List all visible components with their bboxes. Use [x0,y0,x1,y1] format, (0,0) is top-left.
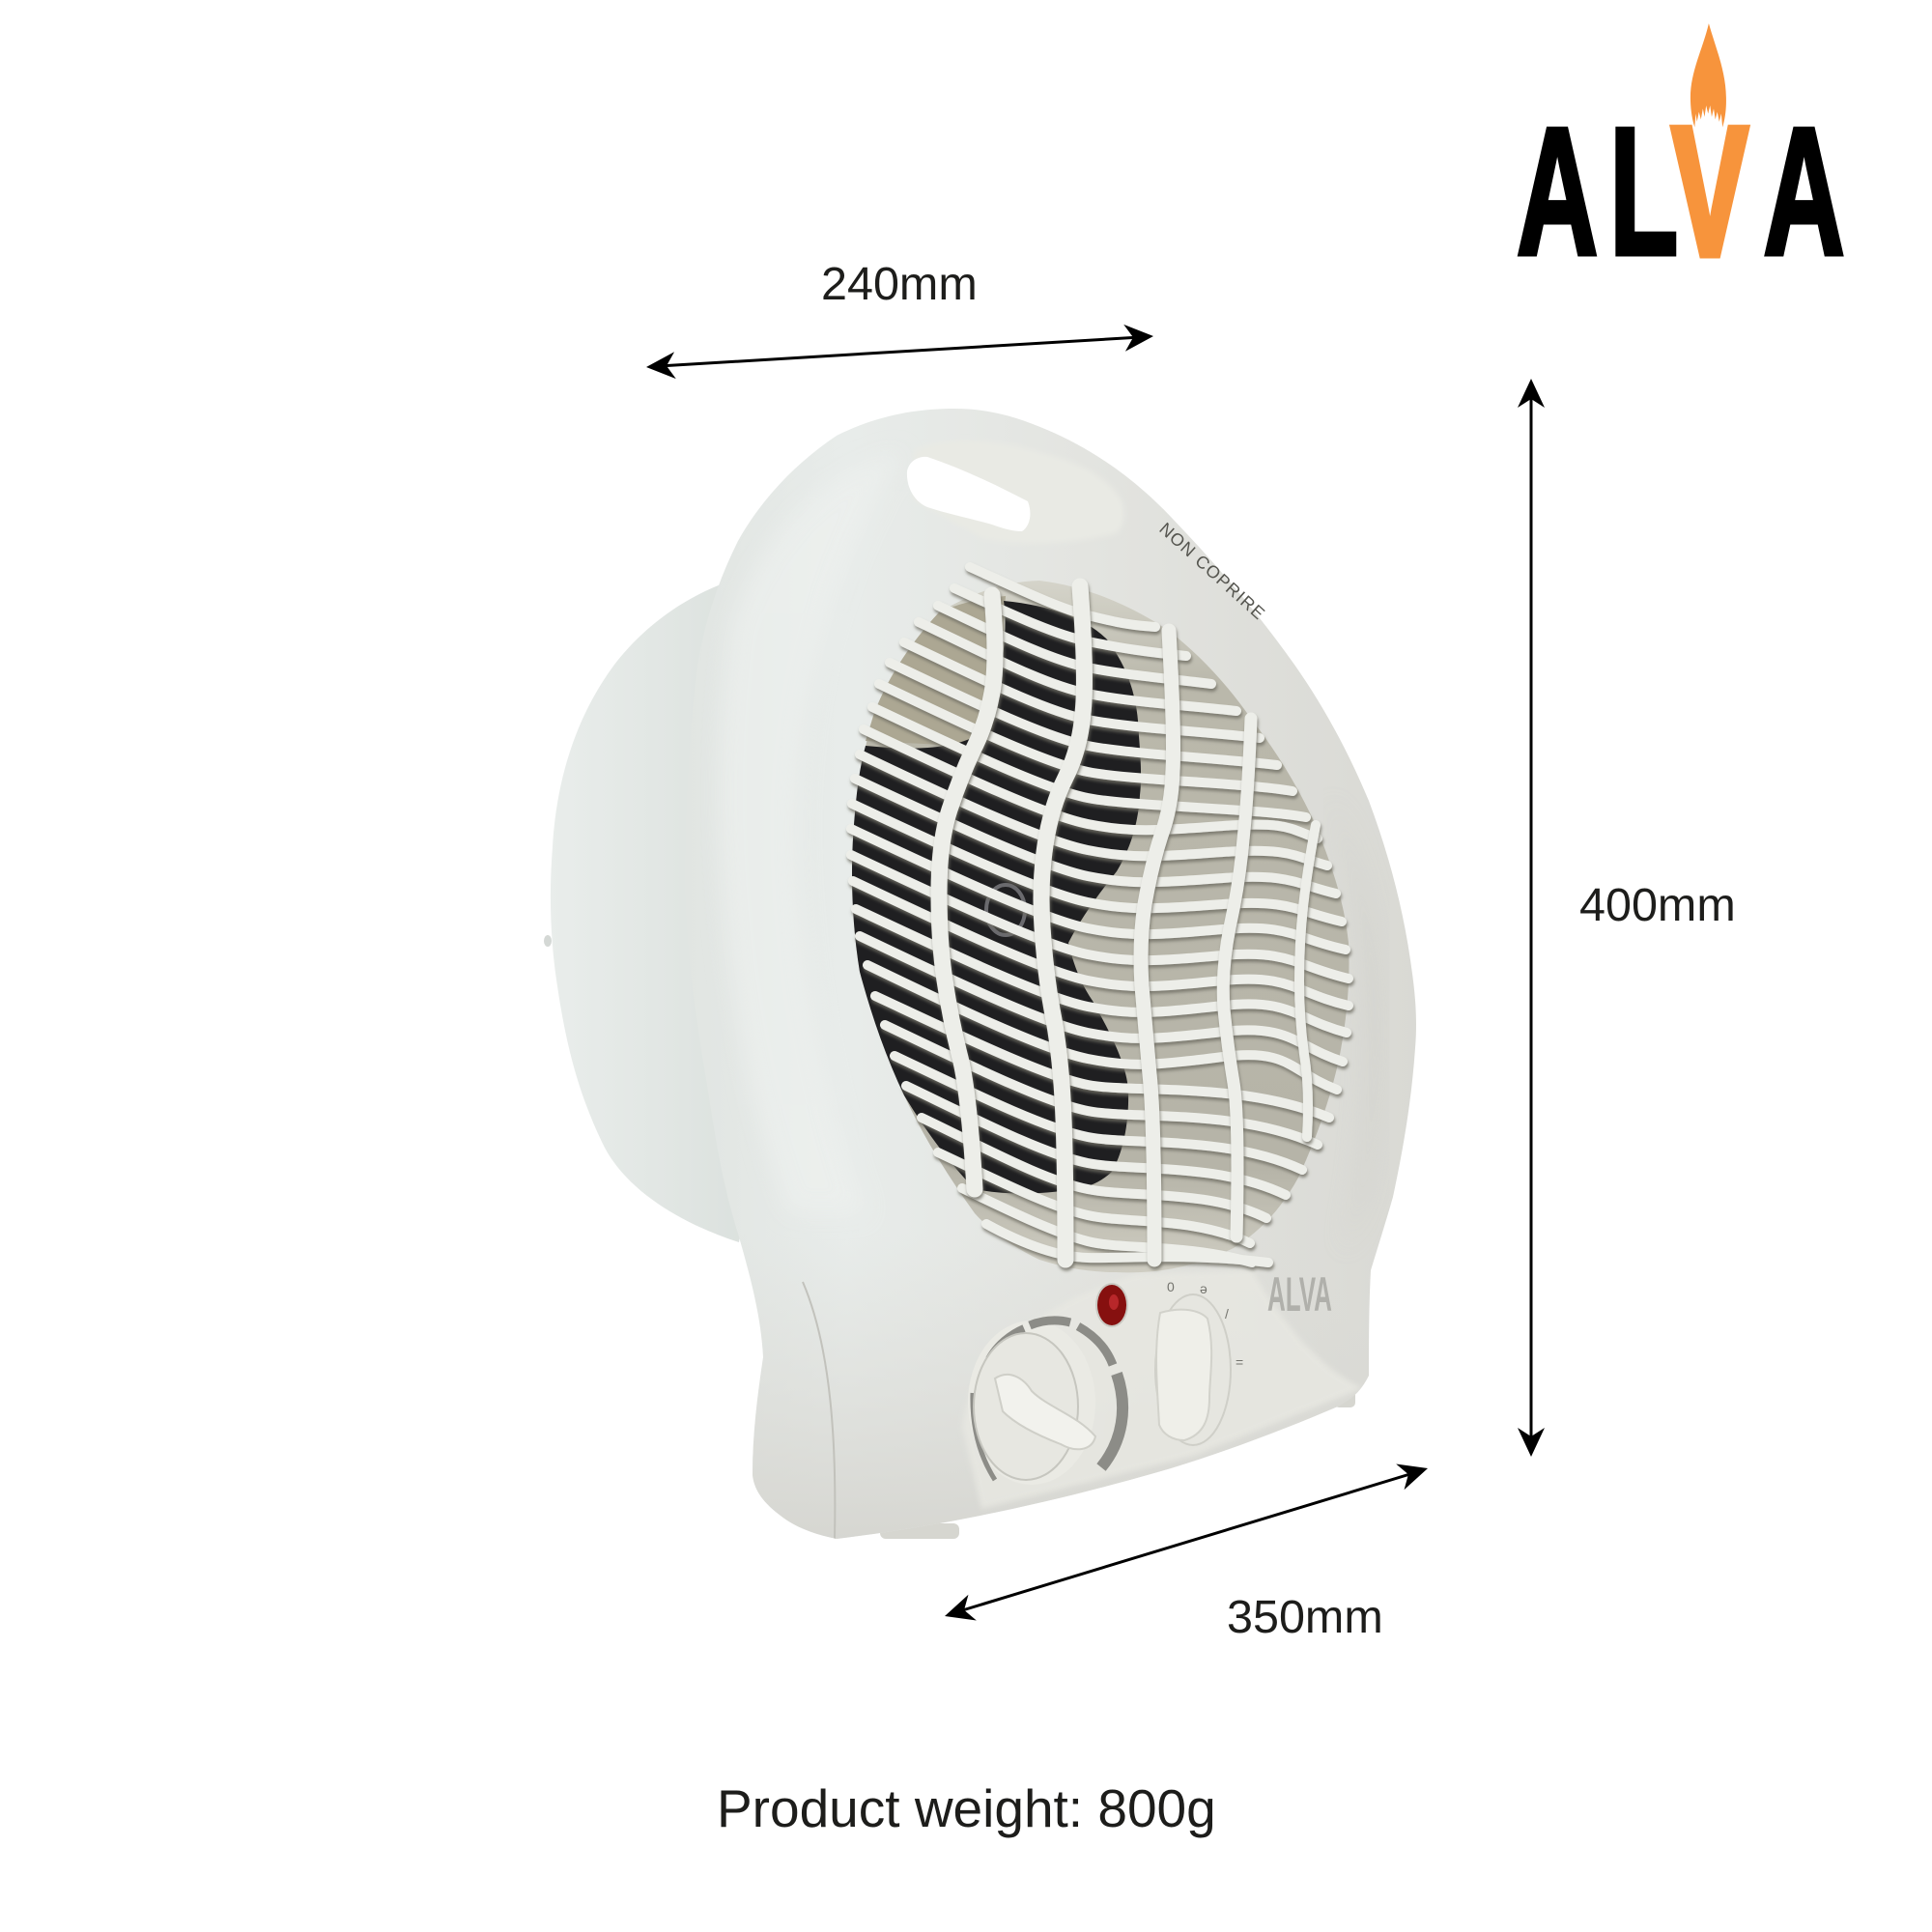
dial pointer handle [995,1375,1095,1449]
arrow: depth [941,1456,1432,1629]
logo: ALVA with flame [1517,23,1845,294]
temperature dial [968,1321,1122,1485]
heater front body [685,409,1416,1539]
dimension: depth 350mm [941,1456,1432,1643]
logo wordmark: ALVA [1517,91,1845,294]
dial scale ring [973,1321,1122,1480]
upper-left heating element [866,596,1006,746]
switch labels: 0 [1167,1279,1175,1294]
arrow: height [1518,379,1545,1457]
logo flame [1690,23,1726,128]
dial recess [968,1321,1095,1485]
fan dark area [852,601,1141,1194]
arrow: width [645,323,1154,381]
heater illustration [544,409,1416,1543]
switch labels: ə [1200,1281,1208,1296]
dial knob [974,1333,1078,1480]
dimension: height 400mm [1518,379,1736,1457]
switch labels: = [1236,1354,1243,1370]
switch labels [1167,1279,1243,1370]
warning text: NON COPRIRE: NON COPRIRE [1155,519,1269,624]
grille opening [852,581,1350,1272]
mode switch [1155,1279,1243,1445]
front brand mark: ALVA [1267,1268,1332,1321]
carry handle [907,440,1124,543]
switch handle [1156,1310,1211,1440]
dimension: width 240mm [645,258,1154,381]
label: 240mm: 240mm [821,258,978,310]
label: 350mm: 350mm [1227,1591,1383,1643]
body shading [753,578,1354,1539]
heater rear drum [544,584,788,1242]
infographic: heater dimensions [544,23,1844,1837]
switch labels: / [1225,1306,1229,1321]
grille vertical ribs [939,586,1316,1260]
product weight: Product weight: 800g [717,1778,1216,1838]
heater feet [880,1388,1355,1539]
label: 400mm: 400mm [1579,879,1736,931]
switch recess [1155,1294,1231,1445]
power indicator light [1095,1283,1128,1327]
grille horizontal bars [851,567,1349,1263]
fan hub [986,885,1025,935]
